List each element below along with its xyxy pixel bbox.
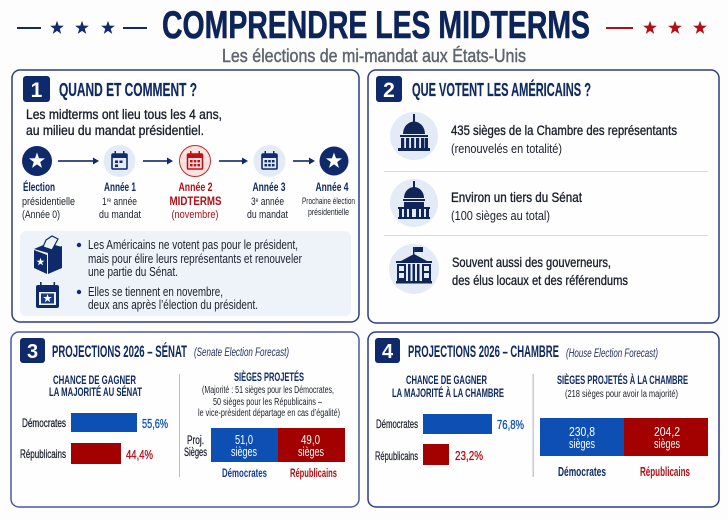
label: annee 3: Année 3 — [252, 182, 286, 194]
icon: right red stars ornament — [606, 21, 707, 34]
stacked bar: sieges senat: sièges — [298, 444, 324, 459]
label: annee 3: du mandat — [247, 209, 288, 221]
seats heading — [198, 371, 340, 419]
icon: star end — [320, 146, 348, 176]
item: chambre: 435 sièges de la Chambre des représentants — [451, 122, 677, 138]
badge 3: 3 — [27, 341, 38, 363]
label: annee 1 — [99, 182, 141, 221]
item note: senat: (100 sièges au total) — [451, 208, 550, 223]
panel: que votent les americains — [368, 70, 719, 323]
arrow — [219, 158, 248, 164]
label: annee 2 midterms: Année 2 — [178, 182, 212, 194]
stacked bar: sieges senat: 51,0 — [235, 432, 253, 447]
icon: calendar year 1 — [104, 145, 136, 177]
icon: ballot box — [34, 236, 62, 274]
info box — [20, 231, 351, 316]
stacked bar: sieges senat: Démocrates — [222, 466, 267, 480]
chart heading: chance — [49, 375, 142, 399]
label: election — [22, 181, 75, 221]
icon: star start — [22, 146, 52, 176]
label: annee 2 midterms — [170, 182, 222, 221]
label: annee 2 midterms: (novembre) — [172, 209, 218, 221]
stacked bar: sieges senat — [184, 428, 345, 480]
label: annee 1: du mandat — [99, 209, 141, 221]
label: annee 3: e — [256, 197, 259, 204]
bar chart: chance senat: 44,4% — [126, 448, 153, 462]
icon: calendar star — [36, 282, 59, 308]
icon: calendar year 3 — [254, 145, 286, 177]
bullets text: Elles se tiennent en novembre, — [88, 285, 223, 299]
stacked bar: sieges senat: Proj. — [187, 435, 204, 447]
badge 4: 4 — [382, 341, 394, 363]
arrow — [58, 158, 99, 164]
item note: chambre: (renouvelés en totalité) — [451, 141, 562, 156]
badge 2: 2 — [383, 79, 395, 102]
bullets text: Les Américains ne votent pas pour le président, — [88, 238, 298, 252]
stacked bar: sieges chambre: sièges — [569, 436, 595, 451]
stacked bar: sieges chambre: Démocrates — [558, 464, 606, 479]
seats heading: (218 sièges pour avoir la majorité) — [565, 389, 678, 400]
bullets text — [77, 238, 302, 312]
label: annee 4: Année 4 — [316, 182, 349, 194]
bar chart: chance chambre: Démocrates — [376, 417, 418, 431]
bar chart: chance senat — [20, 413, 168, 464]
bar chart: chance senat: 55,6% — [142, 417, 168, 431]
item: autres scrutins — [452, 254, 628, 288]
badge 4 — [375, 338, 400, 363]
heading: PROJECTIONS 2026 – SÉNAT — [52, 342, 187, 361]
stacked bar: sieges senat: Républicains — [290, 466, 337, 480]
heading note: (Senate Election Forecast) — [194, 345, 289, 359]
icon: capitol house — [390, 112, 438, 160]
stacked bar: sieges senat: 49,0 — [301, 432, 320, 447]
seats heading: (Majorité : 51 sièges pour les Démocrates, — [202, 385, 334, 396]
timeline — [22, 145, 348, 177]
label: annee 1: année — [111, 196, 137, 208]
icon: calendar midterms — [180, 146, 210, 176]
heading: QUAND ET COMMENT ? — [59, 79, 197, 100]
label: election: présidentielle — [22, 196, 75, 208]
bar chart: chance senat: Républicains — [20, 447, 66, 461]
label: annee 4: Prochaine élection — [302, 196, 355, 207]
intro text: au milieu du mandat présidentiel. — [26, 123, 204, 138]
label: annee 2 midterms: MIDTERMS — [170, 194, 222, 208]
bullets text: deux ans après l’élection du président. — [88, 298, 258, 312]
label: election: Élection — [23, 181, 55, 194]
seats heading: SIÈGES PROJETÉS — [234, 371, 304, 384]
bar chart: chance chambre: Républicains — [375, 449, 418, 463]
heading note: (House Election Forecast) — [566, 346, 658, 360]
item: autres scrutins: Souvent aussi des gouverneurs, — [452, 254, 611, 270]
stacked bar: sieges chambre: Républicains — [640, 464, 690, 479]
chart heading: chance: CHANCE DE GAGNER — [406, 375, 487, 387]
badge 1 — [23, 76, 50, 102]
bullets text: mais pour élire leurs représentants et renouveler — [88, 252, 302, 266]
badge 1: 1 — [31, 79, 43, 102]
bar chart: chance chambre — [375, 414, 524, 465]
icon: government building — [389, 244, 439, 294]
label: annee 4 — [302, 182, 355, 218]
bullets text: une partie du Sénat. — [88, 265, 178, 279]
label: annee 4: présidentielle — [308, 207, 349, 218]
icon: capitol senate — [390, 179, 438, 227]
stacked bar: sieges senat: sièges — [231, 444, 257, 459]
seats heading: le vice-président départage en cas d’égalité) — [198, 408, 340, 419]
icon: left blue stars ornament — [17, 21, 147, 34]
chart heading: chance: CHANCE DE GAGNER — [53, 375, 136, 387]
label: annee 3: année — [258, 196, 284, 208]
label: election: (Année 0) — [22, 209, 60, 221]
title: COMPRENDRE LES MIDTERMS — [162, 4, 590, 47]
label: annee 3 — [247, 182, 288, 221]
item: senat: Environ un tiers du Sénat — [451, 189, 582, 205]
bar chart: chance senat: Démocrates — [22, 416, 66, 430]
stacked bar: sieges chambre: sièges — [654, 436, 680, 451]
chart heading: chance: LA MAJORITÉ À LA CHAMBRE — [392, 387, 504, 400]
panel: quand et comment — [12, 70, 359, 322]
arrow — [143, 158, 173, 164]
label: annee 1: Année 1 — [104, 182, 136, 194]
bar chart: chance chambre: 23,2% — [455, 449, 483, 463]
badge 2 — [376, 76, 402, 102]
stacked bar: sieges chambre: 204,2 — [654, 424, 680, 439]
panel: projections senat — [11, 332, 359, 507]
stacked bar: sieges chambre — [540, 418, 708, 479]
intro text: Les midterms ont lieu tous les 4 ans, — [26, 107, 222, 122]
label: annee 3: 3 — [251, 196, 257, 208]
item: autres scrutins: des élus locaux et des référendums — [452, 272, 628, 288]
bar chart: chance chambre: 76,8% — [497, 418, 524, 432]
label: annee 1: re — [107, 197, 111, 204]
seats heading: 50 sièges pour les Républicains – — [213, 397, 322, 408]
intro text — [26, 107, 222, 138]
heading: QUE VOTENT LES AMÉRICAINS ? — [412, 79, 591, 100]
arrow — [293, 158, 315, 164]
label: annee 1: 1 — [102, 196, 108, 208]
seats heading — [557, 374, 688, 400]
stacked bar: sieges senat: Sièges — [184, 447, 207, 459]
badge 3 — [20, 338, 45, 363]
heading: PROJECTIONS 2026 – CHAMBRE — [408, 343, 559, 361]
stacked bar: sieges chambre: 230,8 — [569, 424, 595, 439]
panel: projections chambre — [368, 332, 719, 507]
chart heading: chance — [392, 375, 504, 400]
chart heading: chance: LA MAJORITÉ AU SÉNAT — [49, 386, 142, 399]
subtitle: Les élections de mi-mandat aux États-Unis — [222, 46, 526, 66]
